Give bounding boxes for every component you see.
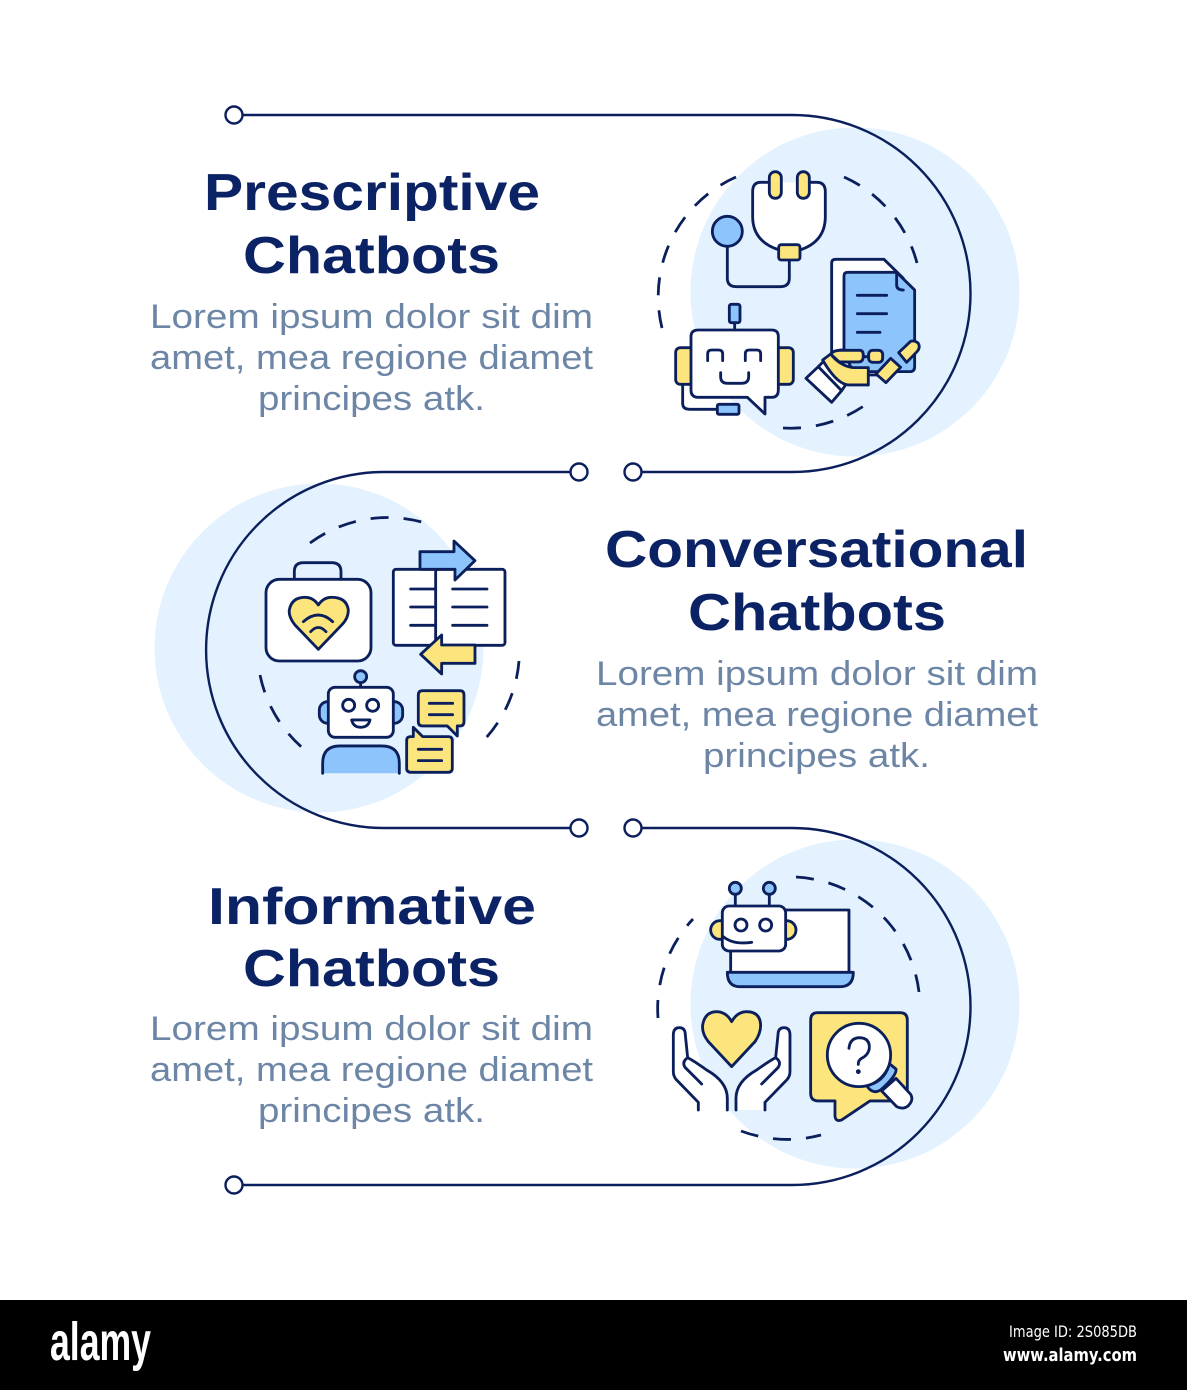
- footer logo: alamy: alamy: [50, 1312, 151, 1372]
- panel: prescriptive chatbots: [150, 128, 1020, 456]
- text block: prescriptive description: [150, 298, 594, 418]
- heading: informative chatbots: [208, 878, 536, 998]
- text block: prescriptive description: Lorem ipsum dolor sit dim: [150, 298, 593, 336]
- text block: prescriptive description: principes atk.: [258, 380, 485, 418]
- icon: medical document: [832, 259, 915, 372]
- heading: informative chatbots: Informative: [208, 878, 536, 936]
- connector line: top: [226, 106, 971, 480]
- icon: question search bubble: [811, 1013, 912, 1121]
- connector line: bottom: [226, 820, 971, 1194]
- panel: conversational chatbots: [154, 484, 1039, 812]
- background circle: conversational: [154, 484, 484, 812]
- icon: medical bag with heart: [266, 563, 371, 661]
- heading: conversational chatbots: Conversational: [605, 521, 1028, 579]
- footer text: website: www.alamy.com: [1003, 1345, 1137, 1366]
- heading: prescriptive chatbots: Chatbots: [243, 227, 500, 285]
- heading: prescriptive chatbots: [204, 164, 540, 285]
- text block: informative description: principes atk.: [258, 1092, 485, 1130]
- text block: conversational description: [596, 655, 1039, 775]
- background circle: informative: [690, 840, 1020, 1168]
- dashed ring: prescriptive: [658, 177, 917, 428]
- icon: translation pages with arrows: [393, 541, 505, 674]
- heading: conversational chatbots: Chatbots: [688, 584, 946, 642]
- background circle: prescriptive: [690, 128, 1020, 456]
- icon: robot on laptop: [711, 882, 853, 987]
- footer text: image id: Image ID: 2S085DB: [1009, 1322, 1137, 1341]
- panel: informative chatbots: [150, 840, 1020, 1168]
- text block: conversational description: amet, mea regione diamet: [596, 696, 1039, 734]
- heading: conversational chatbots: [605, 521, 1028, 642]
- icon: robotic hand: [806, 341, 919, 402]
- text block: informative description: [150, 1010, 594, 1130]
- text block: prescriptive description: amet, mea regione diamet: [150, 339, 594, 377]
- icon: robot with speech bubbles: [319, 671, 464, 773]
- dashed ring: conversational: [260, 518, 519, 750]
- dashed ring: informative: [658, 877, 919, 1139]
- connector line: middle: [206, 464, 588, 836]
- footer bar: [0, 1300, 1187, 1390]
- text block: informative description: Lorem ipsum dolor sit dim: [150, 1010, 593, 1048]
- icon: hands holding heart: [673, 1012, 790, 1110]
- text block: conversational description: principes atk.: [703, 737, 930, 775]
- heading: prescriptive chatbots: Prescriptive: [204, 164, 540, 222]
- icon: headset robot: [676, 304, 793, 414]
- text block: informative description: amet, mea regione diamet: [150, 1051, 594, 1089]
- heading: informative chatbots: Chatbots: [243, 940, 500, 998]
- text block: conversational description: Lorem ipsum dolor sit dim: [596, 655, 1038, 693]
- icon: stethoscope: [712, 172, 825, 287]
